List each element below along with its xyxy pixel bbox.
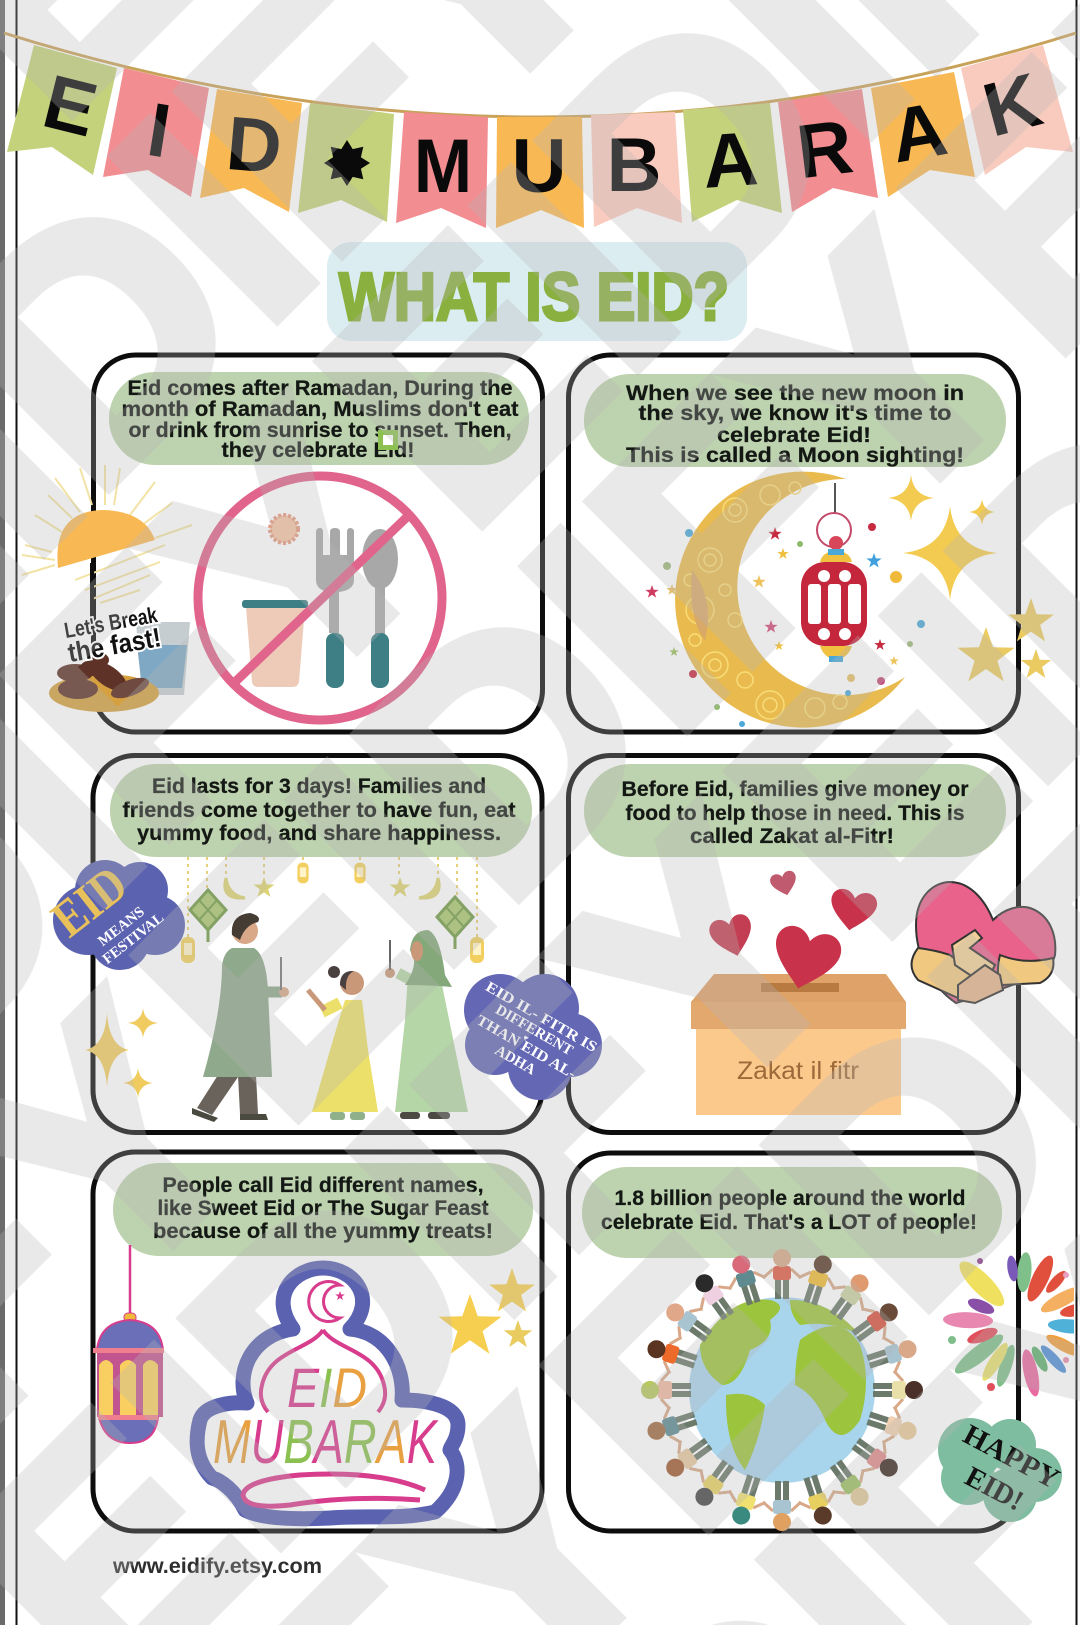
callout: Eid il-Fitr is different: EID IL- FITR IS [482,979,600,1056]
caption bubble [582,1167,1002,1258]
callout: Eid il-Fitr is different: ADHA [492,1043,538,1079]
callout: happy Eid: EID! [960,1461,1029,1518]
illustration: ring of people [641,1249,923,1531]
icon: Eid Mubarak sticker [197,1268,458,1519]
caption text: Eid comes after Ramadan, During the [128,376,513,400]
panel: Ramadan fasting [22,355,542,732]
icon: yellow stars [439,1268,535,1354]
icon: hanging lantern [801,483,867,662]
panel: sweet Eid names [93,1152,542,1531]
panel: people around the world [568,1153,1080,1531]
box label: Zakat il fitr [737,1057,859,1085]
title: what is Eid [327,242,747,341]
caption text [122,774,516,845]
callout: Eid means festival [42,856,185,970]
caption text: food to help those in need. This is [626,801,965,825]
bunting banner: EID MUBARAK: A [884,86,953,180]
icon: gold sparkles [85,1008,158,1098]
icon: setting sun [22,465,192,623]
caption text [626,381,964,467]
bunting banner: EID MUBARAK: K [975,57,1050,154]
caption text: like Sweet Eid or The Sugar Feast [158,1196,488,1220]
icon: donation box [691,923,906,1115]
caption text: People call Eid different names, [162,1173,484,1197]
bunting banner: EID MUBARAK: E [35,59,105,154]
caption text: When we see the new moon in [626,381,964,405]
icon: gold stars [957,598,1054,681]
icon: floating hearts [707,869,879,961]
bunting banner: EID MUBARAK: I [142,87,176,174]
caption text: celebrate Eid. That's a LOT of people! [601,1210,977,1234]
callout: Eid means festival: MEANS [95,904,148,950]
callout: Eid means festival: FESTIVAL [100,910,167,968]
caption text: celebrate Eid! [717,423,871,447]
selection marker [378,430,398,450]
bunting banner: EID MUBARAK: A [700,116,761,205]
bunting banner: EID MUBARAK: U [512,124,566,209]
caption bubble [584,764,1006,857]
caption text: yummy food, and share happiness. [137,821,501,845]
bunting banner: EID MUBARAK [4,33,1076,228]
bunting banner: EID MUBARAK: M [414,124,472,209]
callout: happy Eid [938,1418,1065,1522]
callout: Eid means festival: EID [42,856,138,948]
icon: purple lantern [93,1245,164,1443]
caption text: the sky, we know it's time to [638,401,952,425]
icon: colourful burst [943,1252,1080,1398]
footer: website: www.eidify.etsy.com [112,1555,322,1578]
caption text: 1.8 billion people around the world [614,1186,966,1210]
icon: Eid Mubarak sticker: EID [287,1356,367,1419]
callout: Eid il-Fitr is different [464,974,602,1100]
caption text [601,1186,977,1234]
callout: let's break the fast: Let's Break [62,602,160,643]
icon: no food or drink sign [198,476,442,720]
panel: moon sighting [568,355,1054,732]
icon: hanging decorations [181,857,484,963]
caption text [153,1173,493,1243]
caption text: Before Eid, families give money or [622,777,969,801]
bunting banner: EID MUBARAK: D [223,101,285,190]
caption text: month of Ramadan, Muslims don't eat [122,397,518,421]
icon: dates and water [49,622,190,712]
icon: hugged heart [912,882,1055,1003]
icon: sparkles and confetti [645,475,997,727]
caption bubble [110,764,532,857]
caption bubble [113,1163,533,1256]
bunting banner: EID MUBARAK: B [607,123,661,208]
panel: Zakat al-Fitr [568,756,1055,1132]
caption text: This is called a Moon sighting! [626,443,964,467]
callout: Eid il-Fitr is different: THAN EID AL- [474,1013,578,1082]
caption bubble [109,372,529,465]
callout: let's break the fast: the fast! [66,622,163,668]
callout: Eid il-Fitr is different: DIFFERENT [492,1002,576,1059]
caption text: Eid lasts for 3 days! Families and [152,774,486,798]
caption text: friends come together to have fun, eat [122,798,516,822]
caption text: called Zakat al-Fitr! [690,824,894,848]
icon: crescent moon [675,472,905,728]
callout: let's break the fast [62,602,163,668]
caption text: because of all the yummy treats! [153,1219,493,1243]
panel: three days of Eid [42,756,602,1132]
caption text: they celebrate Eid! [222,438,414,462]
caption text [622,777,969,848]
icon: Eid Mubarak sticker: MUBARAK [213,1408,439,1477]
bunting banner: EID MUBARAK: R [792,104,857,195]
icon: globe [689,1297,875,1483]
caption bubble [584,374,1006,467]
caption text [122,376,518,462]
title: what is Eid: WHAT IS EID? [339,259,729,335]
illustration: family with sparklers [192,913,468,1122]
caption text: or drink from sunrise to sunset. Then, [128,418,512,442]
callout: happy Eid: HAPPY [958,1419,1065,1496]
